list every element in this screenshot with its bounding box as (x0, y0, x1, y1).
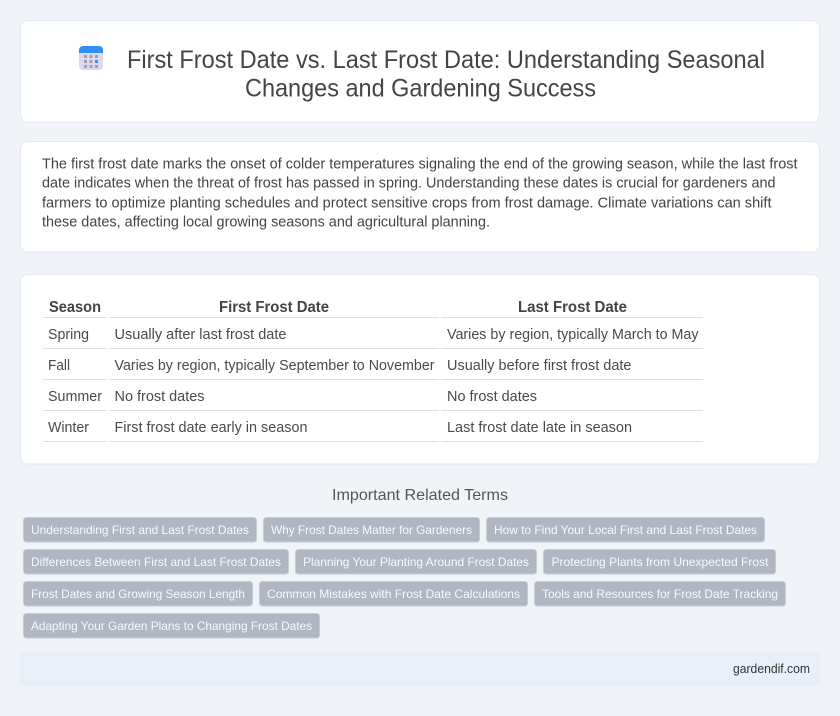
row: summer: Summer (48, 389, 102, 405)
text block: description: these dates, affecting local growing seasons and agricultural planning. (42, 214, 490, 230)
related term tags: Protecting Plants from Unexpected Frost (552, 555, 769, 569)
title: Changes and Gardening Success (245, 74, 596, 102)
row: summer (48, 389, 537, 405)
row: fall: Fall (48, 358, 70, 374)
related term tags: Why Frost Dates Matter for Gardeners (271, 523, 472, 537)
footer: site name: gardendif.com (733, 661, 810, 676)
text block: description: farmers to optimize planting schedules and protect sensitive crops from frost damage. Climate variations can shift (42, 195, 771, 211)
text block: description: The first frost date marks the onset of colder temperatures signaling the end of the growing season, while the last frost (42, 156, 798, 172)
row: winter: First frost date early in season (114, 420, 308, 436)
related term tags: Adapting Your Garden Plans to Changing Frost Dates (31, 619, 312, 633)
table rules (43, 318, 703, 442)
heading: related terms: Important Related Terms (332, 487, 508, 504)
panel: intro text (20, 142, 820, 252)
related term tags: Tools and Resources for Frost Date Tracking (542, 587, 778, 601)
title: First Frost Date vs. Last Frost Date: Understanding Seasonal (127, 46, 765, 74)
row: spring: Usually after last frost date (114, 327, 286, 343)
table header (49, 299, 627, 316)
row: spring: Spring (48, 327, 89, 343)
related term tags: Common Mistakes with Frost Date Calculations (267, 587, 520, 601)
related term tags: Planning Your Planting Around Frost Dates (303, 555, 529, 569)
table header: Last Frost Date (518, 299, 627, 316)
icon: calendar (79, 46, 103, 70)
row: summer: No frost dates (114, 389, 204, 405)
row: fall: Varies by region, typically September to November (114, 358, 435, 374)
panel: title header (20, 20, 820, 122)
row: spring: Varies by region, typically March to May (447, 327, 699, 343)
row: winter: Winter (48, 420, 89, 436)
row: winter: Last frost date late in season (447, 420, 632, 436)
table header: First Frost Date (219, 299, 329, 316)
footer (20, 652, 820, 686)
related term tags: Differences Between First and Last Frost Dates (31, 555, 281, 569)
related term tags (24, 518, 786, 638)
text block: description (42, 156, 798, 230)
row: fall (48, 358, 632, 374)
panel: comparison table (20, 274, 820, 464)
text block: description: date indicates when the threat of frost has passed in spring. Understanding these dates is crucial for gardeners and (42, 176, 776, 192)
row: fall: Usually before first frost date (447, 358, 632, 374)
row: summer: No frost dates (447, 389, 537, 405)
related term tags: Frost Dates and Growing Season Length (31, 587, 245, 601)
row: spring (48, 327, 699, 343)
row: winter (48, 420, 632, 436)
table header: Season (49, 299, 101, 316)
title (127, 46, 765, 102)
related term tags: How to Find Your Local First and Last Frost Dates (494, 523, 757, 537)
related term tags: Understanding First and Last Frost Dates (31, 523, 249, 537)
